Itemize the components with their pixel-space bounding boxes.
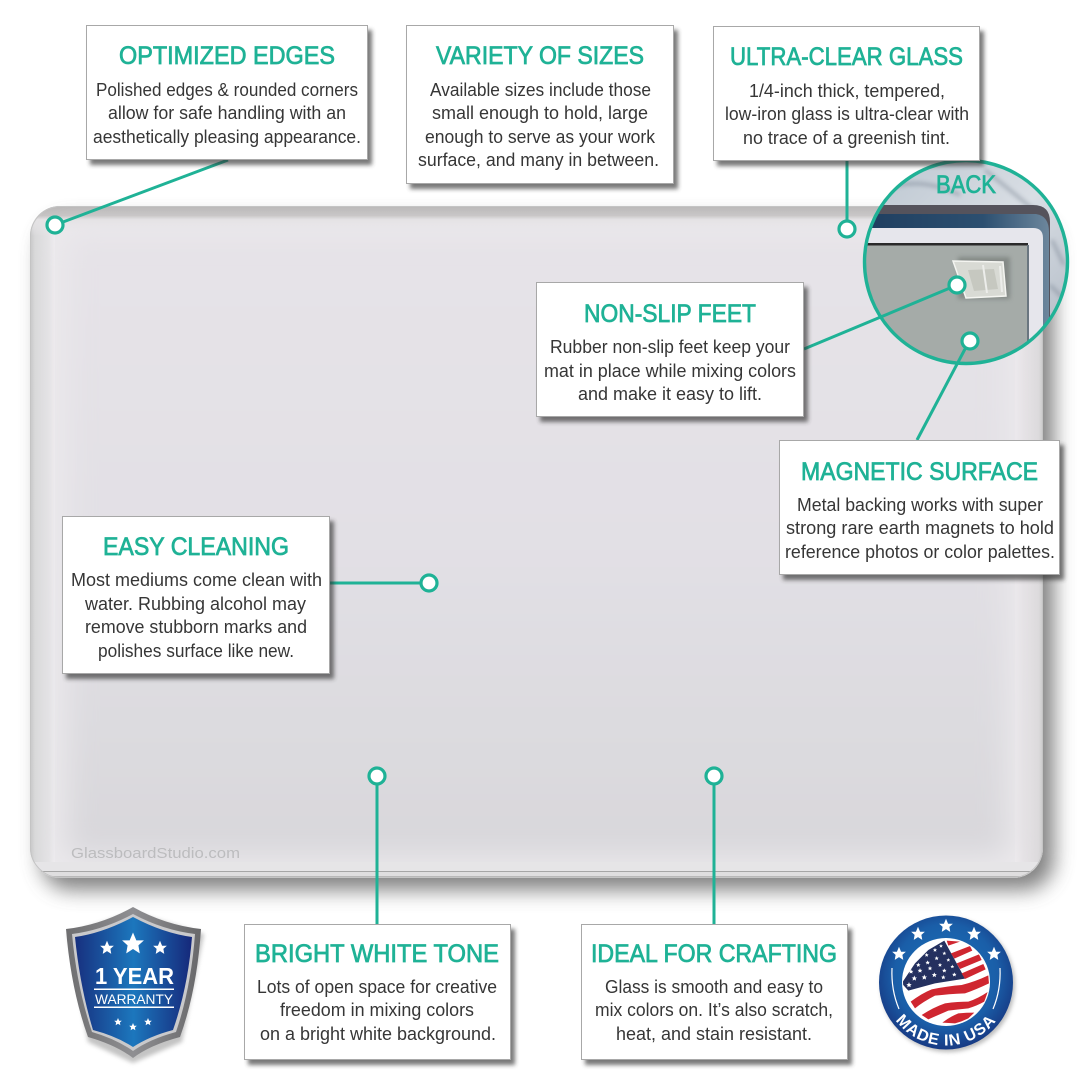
panel: optimized edges: aesthetically pleasing appearance. bbox=[93, 126, 361, 147]
panel: magnetic surface: MAGNETIC SURFACE bbox=[801, 458, 1038, 486]
panel: optimized edges: OPTIMIZED EDGES bbox=[119, 42, 335, 70]
panel: bright white tone: BRIGHT WHITE TONE bbox=[255, 940, 499, 968]
panel: ultra-clear glass bbox=[714, 26, 984, 166]
panel: ideal for crafting: Glass is smooth and easy to bbox=[605, 976, 823, 997]
panel: non-slip feet: NON-SLIP FEET bbox=[584, 300, 756, 328]
panel: ultra-clear glass: ULTRA-CLEAR GLASS bbox=[730, 43, 963, 71]
icon: warranty shield: WARRANTY bbox=[95, 991, 174, 1007]
panel: ultra-clear glass: no trace of a greenish tint. bbox=[743, 127, 950, 148]
panel: easy cleaning bbox=[62, 516, 334, 679]
connector: ideal for crafting bbox=[706, 768, 722, 924]
panel: easy cleaning: remove stubborn marks and bbox=[85, 616, 307, 637]
panel: variety of sizes: Available sizes include those bbox=[430, 79, 651, 100]
connector: ultra-clear glass bbox=[839, 161, 855, 237]
connector: easy cleaning bbox=[330, 575, 437, 591]
panel: variety of sizes: VARIETY OF SIZES bbox=[436, 42, 644, 70]
panel: ideal for crafting bbox=[582, 924, 852, 1065]
panel: bright white tone: freedom in mixing colors bbox=[280, 999, 474, 1020]
connector: optimized edges bbox=[47, 160, 228, 233]
panel: non-slip feet: mat in place while mixing colors bbox=[544, 360, 796, 381]
panel: easy cleaning: Most mediums come clean with bbox=[71, 569, 322, 590]
glass board bbox=[30, 206, 1054, 890]
panel: non-slip feet: Rubber non-slip feet keep your bbox=[550, 336, 790, 357]
panel: bright white tone: on a bright white background. bbox=[260, 1023, 496, 1044]
icon: warranty shield bbox=[66, 907, 204, 1063]
panel: variety of sizes bbox=[406, 26, 678, 189]
back label: BACK bbox=[936, 171, 996, 199]
panel: magnetic surface: strong rare earth magnets to hold bbox=[786, 517, 1054, 538]
panel: ideal for crafting: mix colors on. It’s also scratch, bbox=[595, 999, 833, 1020]
panel: magnetic surface bbox=[780, 440, 1064, 580]
panel: ideal for crafting: IDEAL FOR CRAFTING bbox=[591, 940, 837, 968]
icon: warranty shield: 1 YEAR bbox=[95, 963, 174, 989]
panel: optimized edges bbox=[86, 26, 372, 165]
panel: variety of sizes: surface, and many in between. bbox=[418, 149, 659, 170]
watermark: GlassboardStudio.com bbox=[71, 845, 240, 862]
panel: magnetic surface: Metal backing works with super bbox=[797, 494, 1043, 515]
panel: variety of sizes: enough to serve as your work bbox=[425, 126, 656, 147]
panel: optimized edges: allow for safe handling with an bbox=[108, 102, 346, 123]
panel: ideal for crafting: heat, and stain resistant. bbox=[616, 1023, 812, 1044]
panel: easy cleaning: EASY CLEANING bbox=[103, 533, 289, 561]
panel: magnetic surface: reference photos or color palettes. bbox=[785, 541, 1055, 562]
panel: ultra-clear glass: low-iron glass is ultra-clear with bbox=[725, 103, 969, 124]
panel: bright white tone bbox=[244, 924, 515, 1065]
icon: made in usa badge bbox=[878, 916, 1018, 1054]
connector: bright white tone bbox=[369, 768, 385, 924]
panel: non-slip feet bbox=[536, 282, 808, 422]
connector: non-slip feet bbox=[804, 277, 965, 349]
panel: ultra-clear glass: 1/4-inch thick, tempered, bbox=[749, 80, 945, 101]
panel: easy cleaning: polishes surface like new. bbox=[98, 640, 294, 661]
panel: variety of sizes: small enough to hold, large bbox=[432, 102, 648, 123]
rubber foot bbox=[953, 257, 1010, 299]
icon: made in usa badge: MADE IN USA bbox=[896, 1014, 996, 1046]
panel: easy cleaning: water. Rubbing alcohol may bbox=[84, 593, 307, 614]
inset circle: back of board bbox=[860, 155, 1075, 373]
panel: non-slip feet: and make it easy to lift. bbox=[578, 383, 762, 404]
connector: magnetic surface bbox=[917, 333, 978, 440]
panel: optimized edges: Polished edges & rounded corners bbox=[96, 79, 358, 100]
panel: bright white tone: Lots of open space for creative bbox=[257, 976, 497, 997]
